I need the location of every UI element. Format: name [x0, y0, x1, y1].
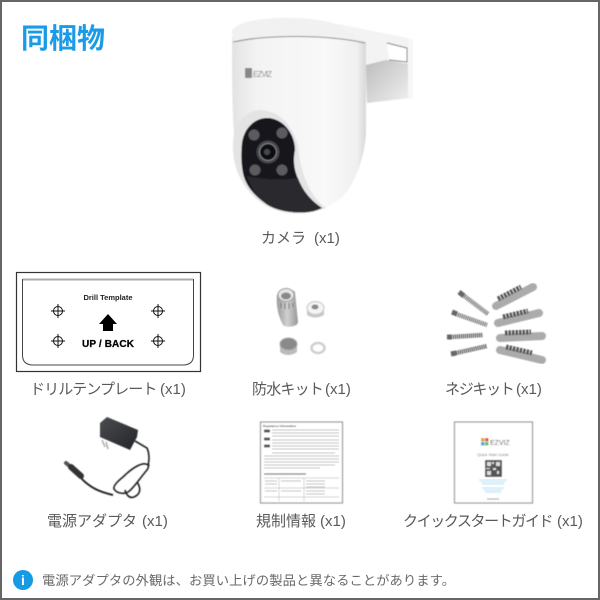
title: 同梱物: [21, 23, 105, 54]
lens: [256, 140, 280, 164]
lens housing dark face: [241, 118, 322, 213]
screws: [447, 292, 488, 354]
power adapter label: 電源アダプタ: [47, 513, 137, 530]
QR code: [485, 460, 502, 477]
drill template heading: Drill Template: [83, 293, 133, 302]
waterproof kit label: (x1): [325, 381, 351, 398]
up back text: UP / BACK: [82, 339, 135, 350]
nut: [307, 302, 324, 318]
LEDs: [248, 128, 288, 176]
drill template label: ドリルテンプレート: [30, 381, 156, 398]
regulatory label: 規制情報: [256, 513, 316, 530]
quick start guide label: (x1): [557, 513, 583, 530]
waterproof kit: [277, 288, 324, 355]
guide logo: EZVIZ: [490, 440, 511, 447]
screw kit label: ネジキット: [445, 381, 514, 398]
icon: camera: [232, 18, 413, 214]
icon: info: i: [21, 572, 25, 588]
regulatory leaflet: Regulatory Information: [263, 424, 296, 428]
lens housing ring: [233, 110, 326, 214]
cap: [280, 338, 297, 355]
screw kit label: (x1): [516, 381, 542, 398]
power adapter: [66, 417, 149, 497]
lens housing lower band: [247, 176, 322, 213]
quick start guide: Quick Start Guide: [477, 452, 510, 457]
quick start guide: [454, 422, 532, 503]
power adapter label: (x1): [142, 513, 168, 530]
note text: 電源アダプタの外観は、お買い上げの製品と異なることがあります。: [42, 573, 455, 588]
icon: info: [13, 570, 33, 590]
up arrow: [99, 314, 117, 331]
drill template label: (x1): [160, 381, 186, 398]
regulatory label: (x1): [320, 513, 346, 530]
brand logo: [245, 68, 272, 79]
gland sleeve: [277, 288, 298, 327]
quick start guide label: クイックスタートガイド: [403, 513, 553, 530]
camera label: (x1): [314, 230, 340, 247]
wall anchors: [496, 287, 542, 360]
regulatory leaflet: [260, 422, 342, 503]
crosshairs: [51, 304, 165, 348]
waterproof kit label: 防水キット: [252, 381, 323, 398]
drill template: [16, 272, 200, 372]
screw kit: [447, 287, 542, 360]
camera dome body: [232, 18, 366, 212]
wall bracket: [333, 23, 413, 103]
brand logo: EZVIZ: [253, 70, 272, 79]
washer: [312, 343, 324, 353]
camera label: カメラ: [261, 230, 306, 247]
